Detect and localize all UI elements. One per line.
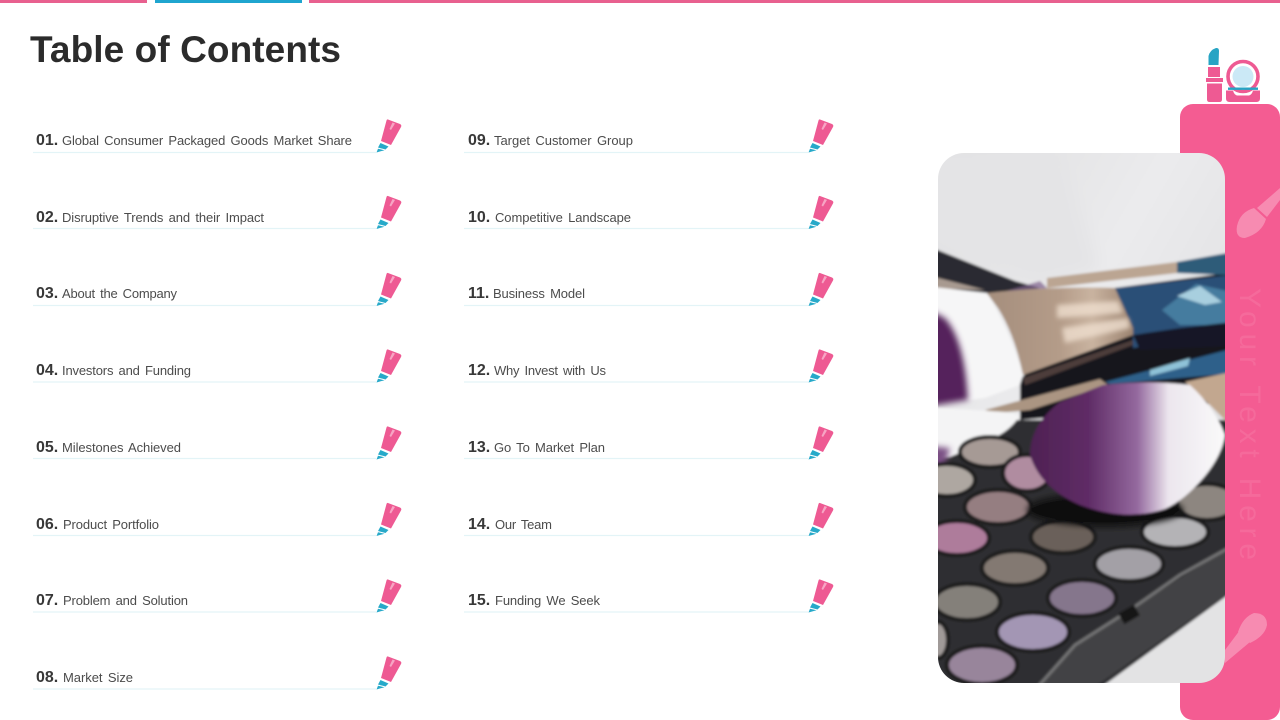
item 08: Market Size [63, 670, 133, 685]
panel: pink sidebar [1180, 104, 1280, 720]
item 06: Product Portfolio [63, 517, 159, 532]
sidebar vertical text: Your Text Here [1233, 288, 1266, 560]
item 15 [464, 579, 833, 612]
icon: brush watermark bottom [1225, 613, 1267, 663]
item 09: 09. [468, 132, 490, 149]
item 04: Investors and Funding [62, 363, 191, 378]
item 07: 07. [36, 592, 58, 609]
title: Table of Contents [30, 29, 341, 70]
item 10: Competitive Landscape [495, 210, 631, 225]
item 01: Global Consumer Packaged Goods Market Share [62, 133, 352, 148]
front ferrule [987, 288, 1133, 375]
item 15: 15. [468, 592, 490, 609]
item 03: 03. [36, 285, 58, 302]
item 12: 12. [468, 362, 490, 379]
large purple brush head [1030, 382, 1225, 515]
item 02 [33, 196, 401, 229]
item 14: 14. [468, 516, 490, 533]
item 05 [33, 426, 401, 460]
item 05: 05. [36, 439, 58, 456]
item 02: Disruptive Trends and their Impact [62, 210, 264, 225]
item 03: About the Company [62, 286, 178, 301]
item 04: 04. [36, 362, 58, 379]
item 13: 13. [468, 439, 490, 456]
item 02: 02. [36, 209, 58, 226]
item 10: 10. [468, 209, 490, 226]
item 05: Milestones Achieved [62, 440, 181, 455]
top accent bars [0, 0, 1280, 3]
item 10 [464, 196, 833, 229]
palette dark body [938, 418, 1225, 683]
icon: brush watermark top [1237, 188, 1280, 238]
item 08: 08. [36, 669, 58, 686]
item 08 [33, 656, 401, 690]
item 13: Go To Market Plan [494, 440, 605, 455]
palette front lip [1044, 552, 1225, 683]
item 04 [33, 349, 401, 382]
item 07 [33, 579, 401, 612]
item 12 [464, 349, 833, 382]
eyeshadow pans [919, 437, 1237, 684]
item 11 [464, 273, 833, 306]
item 12: Why Invest with Us [494, 363, 606, 378]
item 03 [33, 273, 401, 306]
photo: makeup brushes on eyeshadow palette [938, 153, 1225, 683]
dark area behind brushes [1020, 270, 1250, 420]
tan ferrule behind large brush [1184, 371, 1225, 423]
white brush head [938, 286, 1024, 400]
item 06 [33, 503, 401, 536]
shadow beneath large brush [1027, 494, 1183, 526]
item 15: Funding We Seek [495, 593, 600, 608]
brush handle back [1047, 262, 1177, 288]
item 14: Our Team [495, 517, 552, 532]
contents list: right column [464, 119, 833, 612]
item 11: 11. [468, 285, 489, 302]
small lower-left brush [938, 406, 1018, 460]
item 09: Target Customer Group [494, 133, 633, 148]
item 07: Problem and Solution [63, 593, 188, 608]
item 01: 01. [36, 132, 58, 149]
palette edge and white cloth [1103, 594, 1225, 683]
icon: lipstick and compact [1206, 48, 1260, 102]
item 09 [464, 119, 833, 152]
blue faceted handle [1115, 274, 1225, 350]
item 06: 06. [36, 516, 58, 533]
contents list: left column [33, 119, 401, 690]
item 14 [464, 503, 833, 536]
lower blue handle [1105, 348, 1225, 386]
item 11: Business Model [493, 286, 585, 301]
item 01 [33, 119, 401, 152]
item 13 [464, 426, 833, 460]
